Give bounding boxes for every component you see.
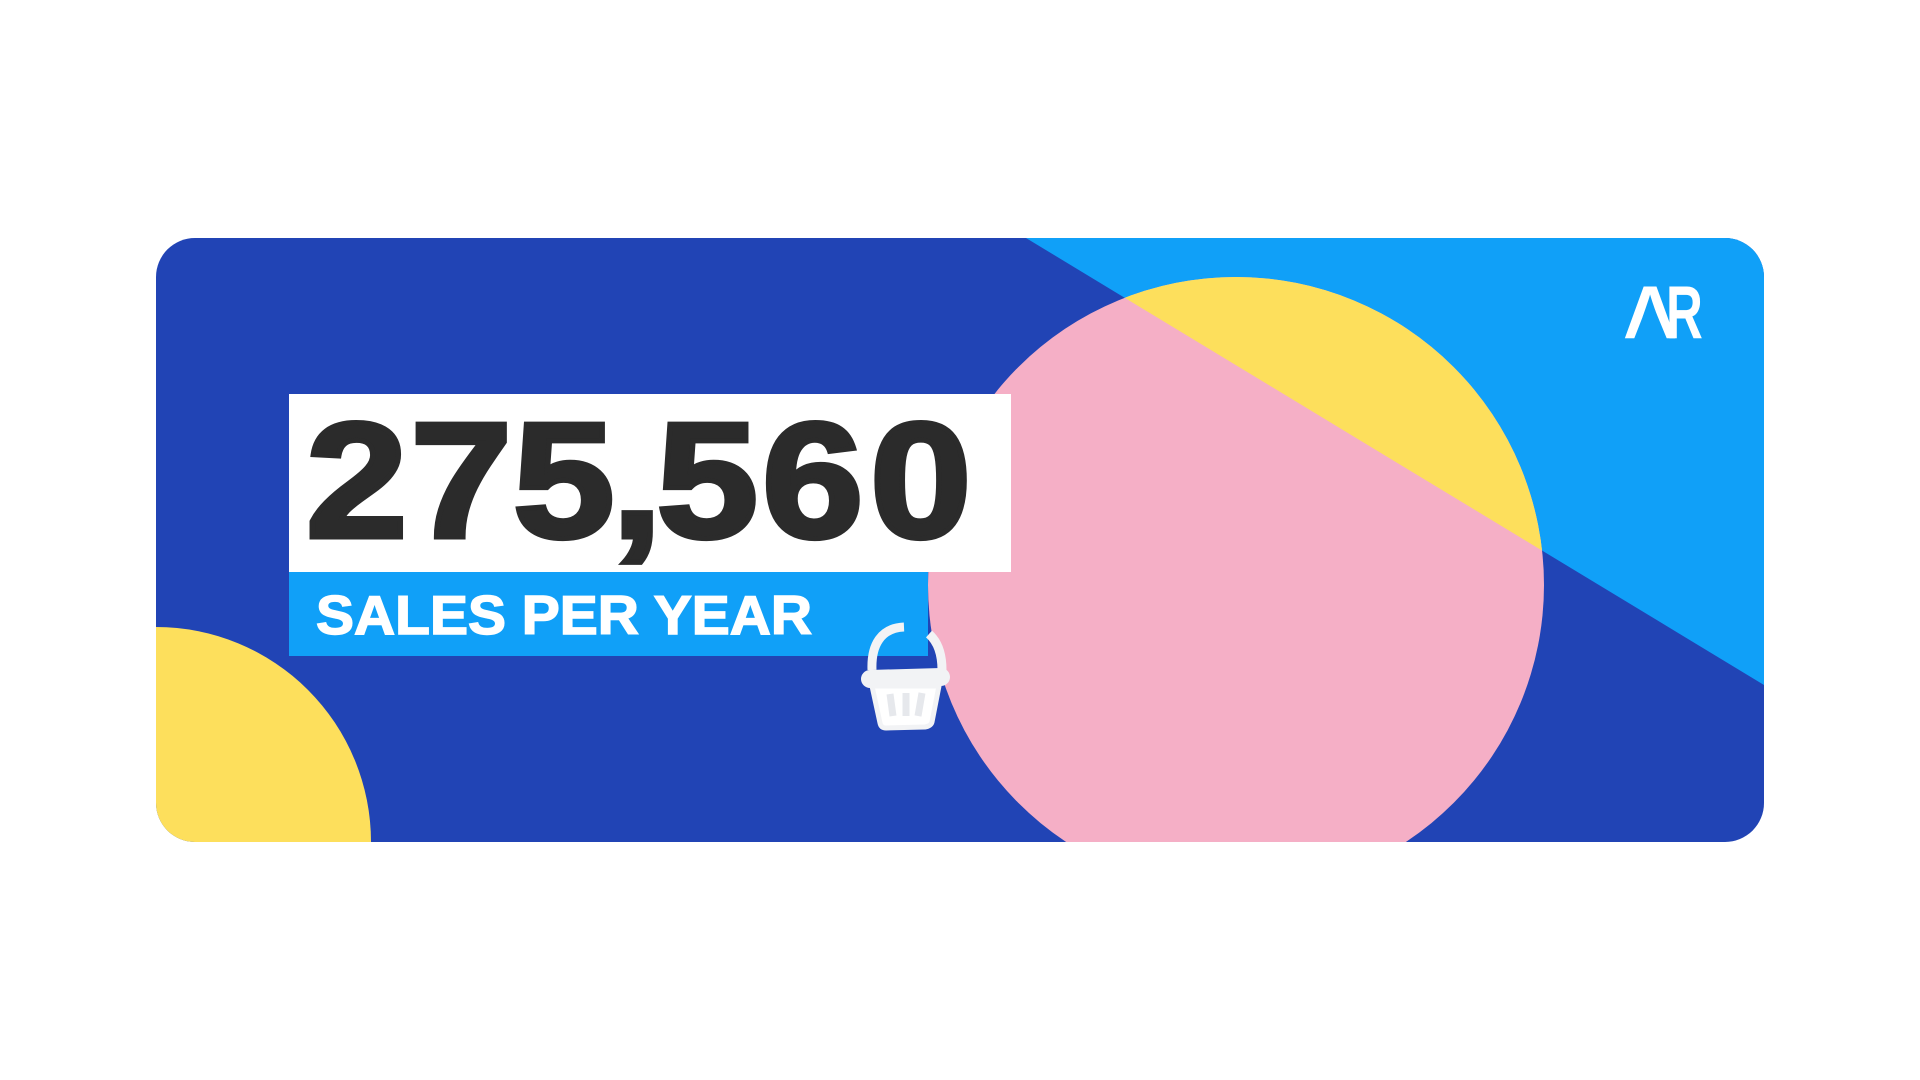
panel: white number box	[289, 394, 1011, 572]
logo: AR: R	[1666, 270, 1703, 354]
label: sales per year: SALES PER YEAR	[316, 584, 812, 646]
logo: AR	[1623, 270, 1703, 354]
yellow quarter circle	[156, 627, 371, 842]
pink circle	[928, 277, 1544, 893]
panel: blue label bar	[289, 572, 928, 656]
logo: AR: A	[1623, 270, 1677, 354]
light blue diagonal wedge	[1026, 238, 1764, 685]
yellow circle segment	[1124, 277, 1542, 550]
panel: rounded card background	[156, 238, 1764, 842]
big number: 275,560	[306, 389, 972, 572]
icon: shopping basket	[870, 627, 942, 728]
